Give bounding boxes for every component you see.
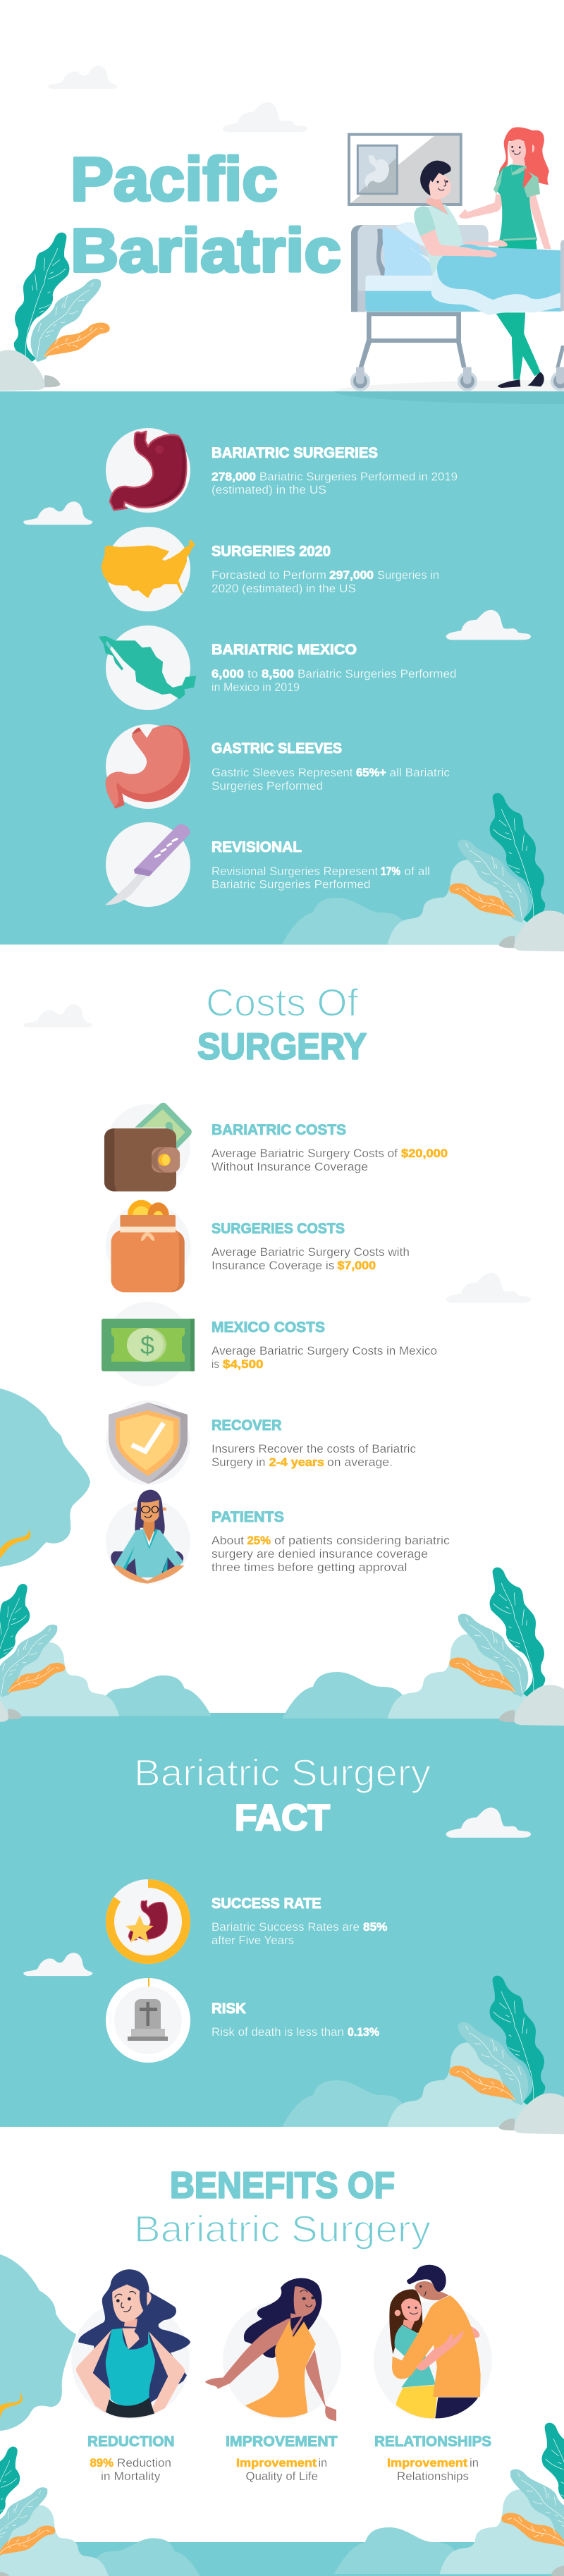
heading: IMPROVEMENT [226, 2432, 338, 2450]
floor shadow [334, 380, 564, 404]
heading: costs of surgery: SURGERY [197, 1026, 367, 1067]
column: improvement [205, 2278, 341, 2483]
cloud [223, 102, 307, 132]
text block: 278,000 [212, 471, 256, 484]
text block: in [319, 2457, 327, 2470]
row: surgeries costs [106, 1200, 410, 1292]
row: mexico costs [102, 1302, 437, 1386]
icon: scalpel [105, 822, 190, 907]
heading: GASTRIC SLEEVES [212, 739, 342, 757]
icon: stomach [106, 428, 190, 513]
text block: 89% [90, 2457, 114, 2470]
text block [212, 569, 439, 595]
text block: of all [405, 865, 430, 878]
icon: banknote: $ [140, 1331, 154, 1360]
text block [212, 865, 430, 891]
heading: SURGERIES COSTS [212, 1219, 345, 1237]
heading: REVISIONAL [212, 838, 302, 855]
row: bariatric surgeries [106, 428, 458, 513]
heading: BARIATRIC SURGERIES [212, 444, 378, 461]
text block [212, 471, 458, 496]
panel: bariatric surgery fact [23, 1752, 564, 2134]
illustration: embracing couple [374, 2265, 492, 2419]
cloud [23, 1004, 93, 1027]
left blob decoration [0, 2254, 76, 2431]
row: gastric sleeves [106, 724, 450, 809]
row: patients [106, 1490, 450, 1584]
illustration: nurse and patient in bed [349, 127, 564, 391]
heading: RELATIONSHIPS [374, 2432, 491, 2450]
heading: SUCCESS RATE [212, 1894, 321, 1912]
text block: $7,000 [337, 1259, 376, 1272]
text block: all Bariatric [389, 767, 450, 779]
hills and plants, right [334, 2423, 564, 2576]
hills and plants [282, 793, 564, 951]
text block: Bariatric Surgeries Performed in 2019 [259, 471, 458, 484]
text block: Surgeries Performed [212, 780, 323, 793]
icon: banknote [102, 1302, 195, 1386]
text block: $20,000 [401, 1147, 448, 1160]
icon: wallet with cash [104, 1103, 192, 1192]
row: bariatric Mexico [99, 625, 457, 710]
text block [387, 2457, 479, 2483]
text block [212, 1345, 437, 1371]
heading: costs of surgery: Costs Of [206, 980, 359, 1024]
text block: 25% [247, 1534, 271, 1547]
heading: benefits: Bariatric Surgery [134, 2209, 431, 2250]
text block: in Mortality [101, 2470, 161, 2483]
heading: SURGERIES 2020 [212, 542, 331, 560]
text block: Average Bariatric Surgery Costs of [212, 1147, 398, 1160]
text block: Without Insurance Coverage [212, 1161, 368, 1173]
hills and plants, right [282, 1568, 564, 1726]
text block: About [212, 1534, 244, 1547]
text block [212, 1147, 448, 1173]
text block [212, 1534, 450, 1574]
text block: 85% [363, 1921, 388, 1934]
text block: is [212, 1358, 219, 1371]
wall frame with x-ray [349, 135, 461, 205]
hills and plants, left [0, 1584, 212, 1723]
text block [212, 1921, 388, 1947]
cloud [23, 1953, 93, 1976]
cloud [446, 1807, 531, 1838]
text block: Average Bariatric Surgery Costs with [212, 1246, 410, 1259]
cloud [446, 610, 531, 640]
text block: 2-4 years [269, 1456, 324, 1469]
icon: ring chart with stomach and star [106, 1879, 190, 1964]
left blob decoration [0, 1388, 90, 1567]
bed [350, 222, 564, 391]
text block: 6,000 [212, 668, 244, 680]
text block [212, 1246, 410, 1272]
column: reduction [71, 2269, 190, 2483]
text block: in Mexico in 2019 [212, 681, 300, 694]
hills and plants, left [0, 2447, 202, 2576]
heading: PATIENTS [212, 1508, 284, 1525]
text block: surgery are denied insurance coverage [212, 1548, 428, 1561]
column: relationships [374, 2265, 492, 2483]
text block: after Five Years [212, 1934, 294, 1947]
blanket [420, 229, 564, 315]
icon: plants and rocks [0, 233, 110, 391]
text block: three times before getting approval [212, 1561, 407, 1574]
row: recover [106, 1400, 416, 1485]
icon: US map [101, 527, 195, 611]
icon: Mexico map [99, 625, 196, 710]
heading: costs of surgery [197, 980, 367, 1067]
text block: Revisional Surgeries Represent [212, 865, 378, 878]
illustration: woman in yellow dress [205, 2278, 341, 2421]
row: bariatric costs [104, 1103, 448, 1192]
text block: 65%+ [356, 767, 386, 779]
text block: Risk of death is less than [212, 2026, 344, 2039]
text block: Average Bariatric Surgery Costs in Mexico [212, 1345, 437, 1357]
heading: BARIATRIC COSTS [212, 1121, 346, 1138]
panel: costs of surgery [0, 980, 564, 1726]
text block [236, 2457, 327, 2483]
text block: Quality of Life [245, 2470, 318, 2483]
text block: Bariatric Success Rates are [212, 1921, 360, 1934]
text block: $4,500 [223, 1358, 264, 1371]
heading: bariatric surgery fact: FACT [235, 1797, 330, 1838]
text block: 0.13% [348, 2026, 379, 2039]
panel: benefits of bariatric surgery [0, 2166, 564, 2576]
heading: bariatric surgery fact [134, 1752, 431, 1838]
text block: Forcasted to Perform [212, 569, 326, 582]
text block: in [470, 2457, 479, 2470]
heading: bariatric surgery fact: Bariatric Surgery [134, 1752, 431, 1794]
icon: shield [106, 1400, 190, 1485]
text block: Reduction [117, 2457, 171, 2470]
title: Bariatric [70, 216, 341, 285]
cloud [446, 1273, 531, 1302]
text block: Surgery in [212, 1456, 265, 1469]
row: surgeries 2020 [101, 527, 439, 611]
heading: MEXICO COSTS [212, 1318, 325, 1336]
panel: hero header [0, 66, 564, 404]
text block: Surgeries in [377, 569, 439, 582]
text block: Improvement [387, 2457, 468, 2470]
panel: US and Mexico surgery statistics [23, 428, 564, 951]
heading: BARIATRIC MEXICO [212, 640, 357, 658]
text block: 297,000 [329, 569, 374, 582]
icon: ring chart with tombstone [106, 1978, 190, 2063]
cloud [23, 501, 93, 525]
text block: to [247, 668, 258, 680]
text block: 8,500 [262, 668, 294, 680]
text block: Gastric Sleeves Represent [212, 767, 353, 779]
text block: (estimated) in the US [212, 484, 326, 496]
row: success rate [106, 1879, 388, 1964]
title: Pacific [70, 145, 278, 214]
text block: Bariatric Surgeries Performed [212, 879, 371, 891]
row: revisional [105, 822, 430, 907]
text block: Relationships [397, 2470, 469, 2483]
text block: Insurance Coverage is [212, 1259, 334, 1272]
text block: of patients considering bariatric [274, 1534, 450, 1547]
heading: benefits: BENEFITS OF [170, 2166, 395, 2206]
icon: woman patient [106, 1490, 190, 1584]
text block [212, 767, 450, 793]
icon: money bag [106, 1200, 190, 1292]
text block: 2020 (estimated) in the US [212, 582, 356, 595]
text block: Bariatric Surgeries Performed [298, 668, 457, 680]
text block: Insurers Recover the costs of Bariatric [212, 1443, 416, 1455]
heading: RISK [212, 1999, 246, 2017]
illustration: woman with hands on hips [71, 2269, 190, 2419]
nurse [459, 127, 551, 388]
text block [90, 2457, 171, 2483]
text block [212, 668, 457, 694]
heading: RECOVER [212, 1416, 282, 1434]
text block [212, 1443, 416, 1469]
text block: on average. [327, 1456, 393, 1469]
hills and plants [282, 1976, 564, 2134]
cloud [48, 66, 118, 89]
heading: REDUCTION [87, 2432, 175, 2450]
text block: Improvement [236, 2457, 317, 2470]
row: risk [106, 1978, 379, 2063]
title [70, 145, 341, 285]
text block: 17% [381, 865, 400, 878]
icon: pink stomach [106, 724, 190, 809]
heading: benefits [134, 2166, 431, 2250]
patient [414, 161, 508, 275]
